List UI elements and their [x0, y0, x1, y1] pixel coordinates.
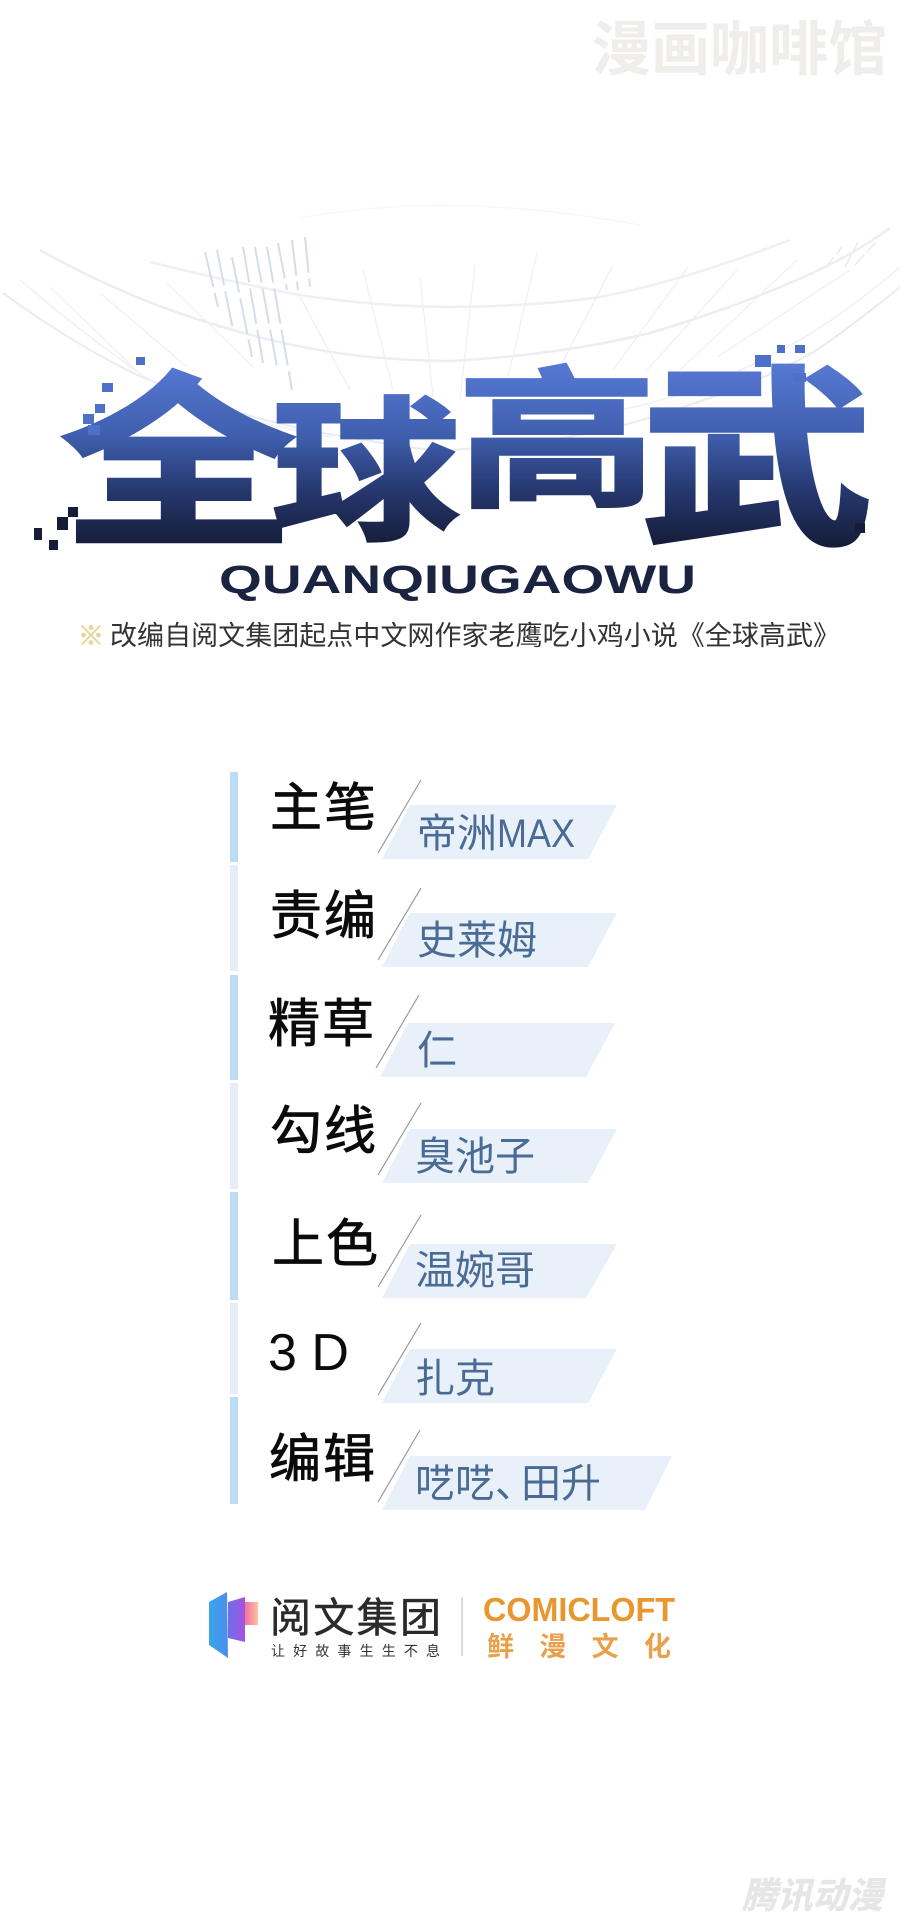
credit row: 主笔	[270, 780, 617, 859]
logo: China Literature	[209, 1592, 441, 1659]
logo: China Literature: 让好故事生生不息	[271, 1643, 440, 1659]
credit row: 上色: 温婉哥	[415, 1249, 535, 1293]
credit row: 勾线	[270, 1103, 617, 1183]
credit row: 编辑: 编辑	[269, 1431, 377, 1489]
logo divider	[461, 1597, 463, 1656]
subtitle note: 改编自阅文集团起点中文网作家老鹰吃小鸡小说《全球高武》	[110, 621, 840, 651]
logo: Comic Loft: COMICLOFT	[483, 1591, 675, 1628]
credit row: 责编: 史莱姆	[417, 919, 537, 963]
credit row: 上色: 上色	[272, 1216, 380, 1274]
globe grid background	[3, 206, 900, 450]
title pixel decorations	[34, 345, 865, 550]
title logo: 全球高武: 高	[457, 358, 657, 526]
credit row: 勾线: 臭池子	[415, 1135, 535, 1179]
credit row: 主笔: 帝洲	[417, 812, 497, 856]
credit row: 3D: 扎克	[415, 1357, 495, 1401]
credit row: 精草	[268, 995, 615, 1077]
credit row: 责编: 责编	[270, 888, 378, 946]
credit row: 3D: 3 D	[268, 1324, 349, 1382]
credit row: 编辑: 田升	[521, 1462, 601, 1506]
logo: Comic Loft	[483, 1591, 675, 1662]
icon: book mark	[209, 1592, 258, 1658]
credit row: 编辑	[269, 1430, 672, 1510]
credit row: 主笔: 主笔	[270, 780, 378, 838]
subtitle note: ※	[78, 621, 104, 651]
credits side bar	[230, 772, 238, 1504]
credit row: 3D	[268, 1323, 617, 1403]
title romanisation: QUANQIUGAOWU	[219, 558, 696, 602]
watermark: Tencent comics: 腾讯动漫	[742, 1875, 887, 1916]
credit row: 责编	[270, 888, 617, 967]
logo: China Literature: 阅文集团	[270, 1595, 441, 1641]
credit row: 精草: 精草	[268, 996, 376, 1054]
title logo: 全球高武: 武	[641, 355, 873, 569]
credit row: 编辑: 呓呓、	[415, 1462, 535, 1506]
credit row: 精草: 仁	[417, 1029, 457, 1073]
credit row: 上色	[272, 1215, 617, 1298]
title logo: 全球高武: 球	[272, 388, 460, 560]
logo: Comic Loft: 鲜漫文化	[487, 1632, 671, 1662]
watermark: manhua cafe: 漫画咖啡馆	[592, 17, 887, 83]
title logo: 全球高武: 全	[61, 362, 296, 568]
title logo: 全球高武	[61, 355, 873, 569]
credit row: 主笔: MAX	[497, 812, 575, 856]
credit row: 勾线: 勾线	[270, 1103, 378, 1161]
